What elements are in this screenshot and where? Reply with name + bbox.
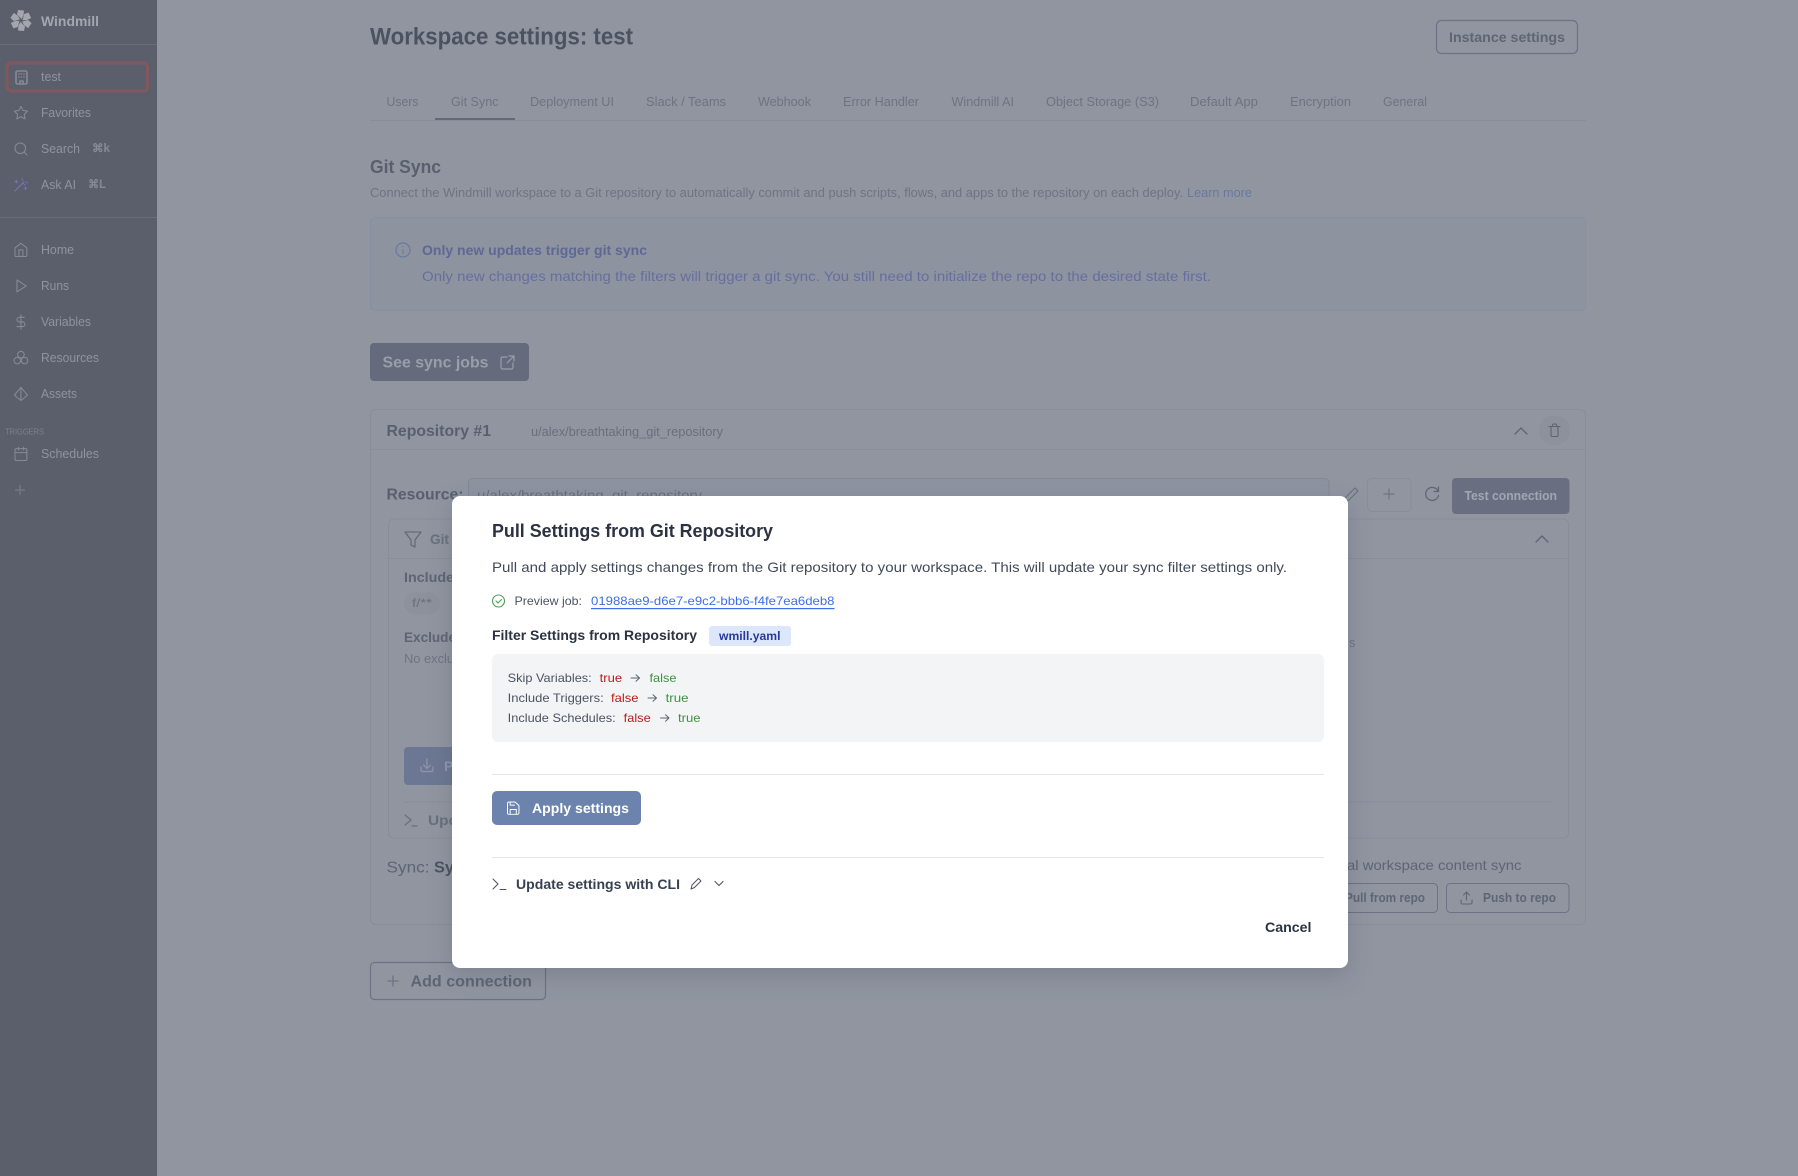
resource label: Resource: [386, 486, 464, 504]
menu: runs [17, 279, 69, 293]
menu: search [15, 142, 111, 156]
icon: edit resource [1345, 488, 1358, 501]
icon: filter [405, 532, 421, 547]
cancel button: Cancel [1265, 919, 1312, 935]
menu: favorites [14, 106, 91, 120]
push to repo button: Push to repo [1483, 891, 1556, 905]
instance settings button: Instance settings [1449, 29, 1565, 45]
section description: Learn more [1187, 186, 1252, 200]
tabs: Deployment UI [530, 95, 614, 109]
tabs: Object Storage (S3) [1046, 95, 1159, 109]
tabs: Encryption [1290, 95, 1351, 109]
section heading: git sync: Git Sync [370, 157, 441, 177]
preview job row: Preview job: [514, 594, 582, 608]
title: Workspace settings: test [370, 24, 633, 50]
note tail: s [1349, 636, 1355, 650]
push to repo button [1446, 884, 1569, 912]
menu: resources: Resources [41, 351, 99, 365]
tabs: General [1383, 95, 1427, 109]
add connection button [370, 962, 546, 1000]
menu: runs: Runs [41, 279, 69, 293]
menu: variables: Variables [41, 315, 91, 329]
diff: skip variables: Skip Variables: [508, 671, 592, 685]
tabs: Slack / Teams [646, 95, 726, 109]
filter heading: Git [430, 531, 449, 547]
diff: include triggers [508, 691, 689, 705]
pull from repo button [1340, 884, 1438, 912]
icon: refresh [1426, 487, 1438, 500]
section label: triggers: TRIGGERS [5, 428, 44, 436]
settings diff box [492, 654, 1324, 742]
menu: resources [14, 351, 99, 365]
resource input: u/alex/breathtaking_git_repository [477, 487, 702, 503]
badge: wmill.yaml: wmill.yaml [718, 629, 780, 643]
diff: include schedules: true [678, 711, 701, 725]
menu: assets: Assets [41, 387, 77, 401]
pull settings button: P [444, 758, 453, 774]
panel: repository card [370, 410, 1586, 924]
diff: include triggers: Include Triggers: [508, 691, 604, 705]
modal dialog [452, 496, 1348, 968]
modal description: Pull and apply settings changes from the Git repository to your workspace. This will update your sync filter settings only. [492, 559, 1287, 575]
diff: include schedules [508, 711, 701, 725]
diff: include schedules: false [624, 711, 651, 725]
add resource button [1368, 478, 1411, 512]
menu: schedules: Schedules [41, 447, 99, 461]
menu: schedules [15, 447, 99, 461]
icon: add menu item [15, 485, 25, 495]
sync mode label: Sync: [386, 860, 430, 876]
pull settings button [404, 747, 464, 785]
diff: include schedules: Include Schedules: [508, 711, 616, 725]
diff: include triggers: true [666, 691, 689, 705]
icon: collapse [1515, 428, 1527, 434]
include pill [404, 592, 440, 614]
badge: wmill.yaml [709, 626, 791, 646]
tabs: Git Sync [451, 95, 498, 109]
alert: only new updates [370, 218, 1586, 310]
test connection button: Test connection [1464, 489, 1557, 503]
sync mode label: Sy [434, 860, 454, 876]
repository path: u/alex/breathtaking_git_repository [531, 425, 724, 439]
see sync jobs button: See sync jobs [382, 354, 489, 372]
menu: ask ai: ⌘L [88, 178, 106, 191]
icon: delete [1539, 416, 1570, 445]
panel: sidebar [0, 0, 157, 1176]
filter settings heading: Filter Settings from Repository [492, 627, 697, 643]
preview job row [492, 594, 835, 608]
repository heading: Repository #1 [386, 423, 491, 440]
brand name: Windmill [41, 13, 99, 29]
pull from repo button: Pull from repo [1345, 891, 1425, 905]
preview job row: 01988ae9-d6e7-e9c2-bbb6-f4fe7ea6deb8 [591, 594, 835, 608]
cli row: Upd [428, 812, 458, 828]
modal title: Pull Settings from Git Repository [492, 521, 773, 541]
menu: search: ⌘k [92, 142, 111, 155]
cli row [405, 812, 458, 828]
menu: ask ai: Ask AI [41, 178, 76, 192]
section description: Connect the Windmill workspace to a Git repository to automatically commit and push scripts, flows, and apps to the repository on each deploy. [370, 186, 1183, 200]
tabs [370, 95, 1586, 120]
tabs: Windmill AI [952, 95, 1014, 109]
see sync jobs button [370, 343, 529, 381]
menu: search: Search [41, 142, 80, 156]
sync description tail: al workspace content sync [1347, 857, 1522, 873]
panel: git sync filter card [388, 519, 1568, 838]
test connection button [1452, 478, 1570, 514]
resource input [468, 478, 1329, 518]
tabs: Error Handler [843, 95, 919, 109]
apply settings button [492, 791, 641, 825]
diff: skip variables [508, 671, 677, 685]
menu: assets [14, 387, 77, 401]
workspace selector: test [41, 70, 62, 84]
icon: windmill logo [10, 10, 32, 31]
sync mode label [386, 860, 454, 876]
exclude label: Exclude [404, 629, 456, 645]
cli toggle: Update settings with CLI [516, 876, 680, 892]
diff: skip variables: true [600, 671, 622, 685]
menu: home [15, 243, 74, 257]
menu: home: Home [41, 243, 74, 257]
include label: Include [404, 569, 454, 585]
alert: only new updates: Only new changes matching the filters will trigger a git sync. You still need to initialize the repo to the desired state first. [422, 268, 1211, 284]
menu: favorites: Favorites [41, 106, 91, 120]
diff: include triggers: false [611, 691, 639, 705]
workspace selector [7, 63, 148, 91]
instance settings button [1436, 20, 1578, 54]
alert: only new updates: Only new updates trigger git sync [422, 242, 647, 258]
tabs: Default App [1190, 95, 1258, 109]
include pill: f/** [412, 596, 432, 610]
icon: collapse filters [1536, 536, 1548, 542]
add connection button: Add connection [410, 974, 532, 990]
apply settings button: Apply settings [532, 800, 629, 816]
menu: variables [17, 315, 91, 329]
diff: skip variables: false [650, 671, 677, 685]
tabs: Webhook [758, 95, 812, 109]
exclude empty note: No exclu [404, 652, 454, 666]
menu: ask ai [15, 178, 106, 192]
tabs: Users [386, 95, 418, 109]
